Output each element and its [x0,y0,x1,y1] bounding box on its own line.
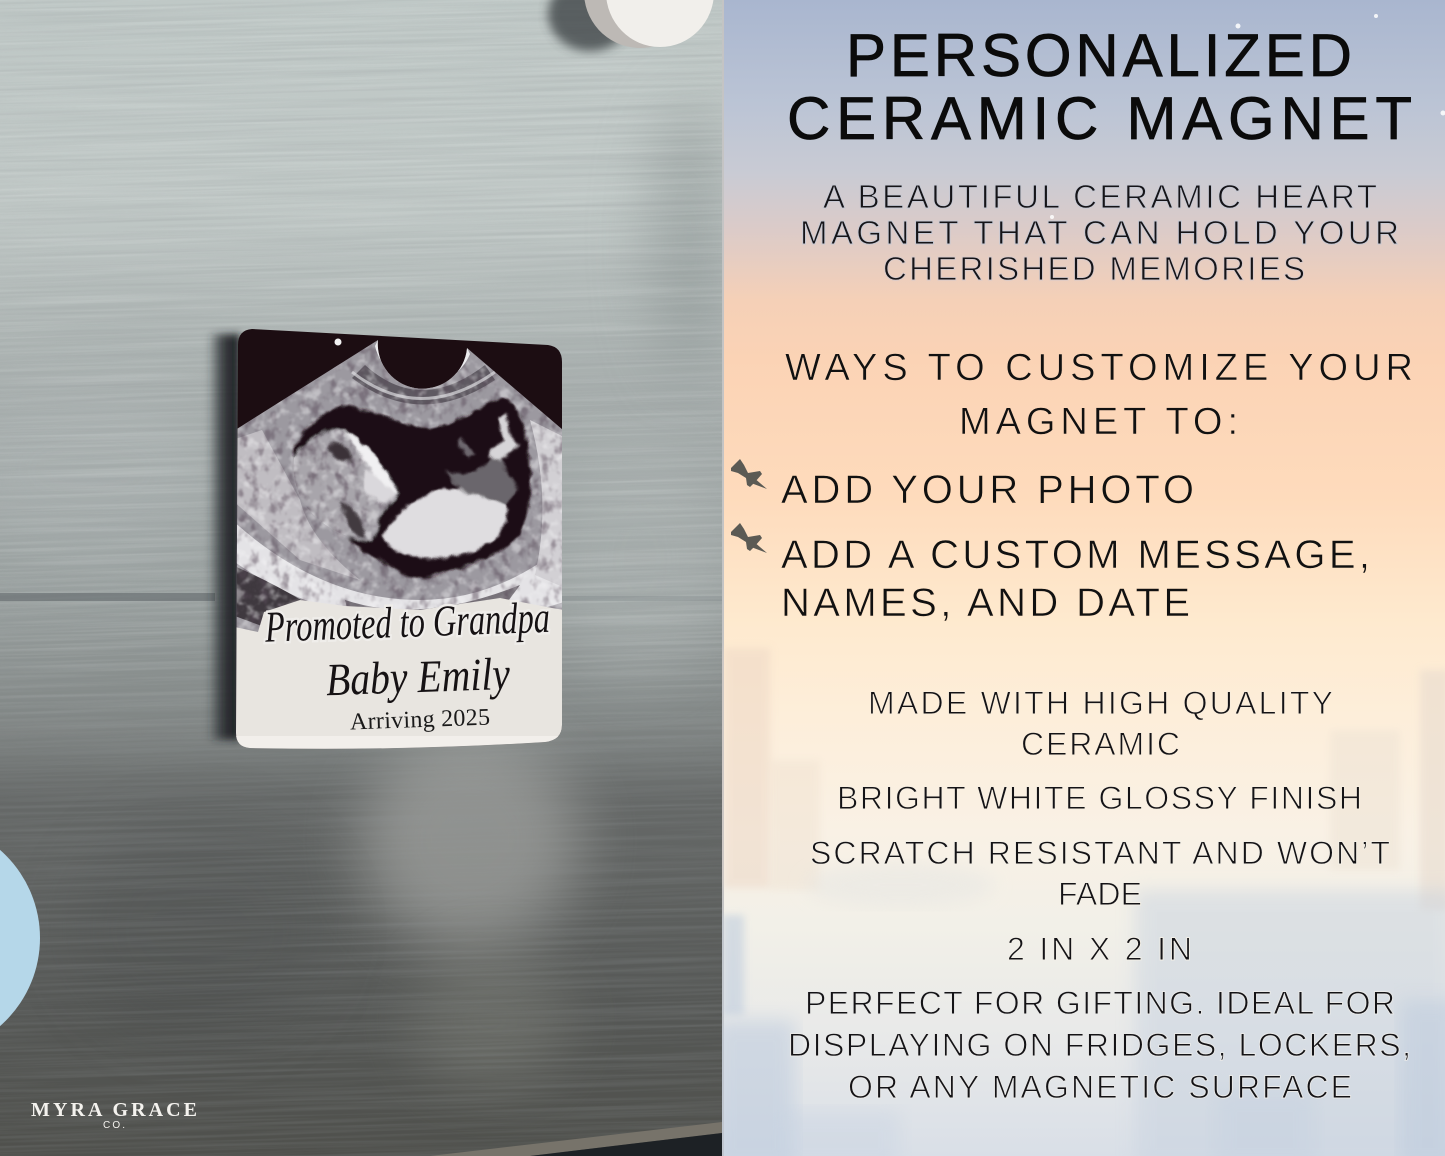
icon: push pin 2 [731,523,767,553]
ultrasound scan [230,330,570,640]
intro text [802,185,1398,281]
feature: scratch resistant [811,841,1390,906]
fridge magnet: white round top [548,0,714,64]
customize option: message: NAMES, AND DATE [781,581,1190,625]
icon: push pin 1 [731,459,767,489]
magnet shadow [208,334,240,740]
title: PERSONALIZED [846,22,1352,89]
customize option: message [782,540,1366,621]
title [790,33,1411,140]
customize option: message: ADD A CUSTOM MESSAGE, [781,533,1370,577]
brand logo: CO. [103,1120,125,1131]
feature: gifting and uses: OR ANY MAGNETIC SURFACE [848,1069,1352,1105]
brand logo: MYRA GRACE [31,1099,197,1121]
feature: high quality ceramic [871,692,1332,755]
fridge magnet: blue round left [0,850,40,1026]
brand logo [31,1103,196,1128]
customize heading: WAYS TO CUSTOMIZE YOUR [785,347,1413,389]
ceramic magnet [230,325,570,760]
feature: high quality ceramic: CERAMIC [1021,726,1180,762]
feature: gifting and uses [790,990,1408,1099]
feature: size: 2 IN X 2 IN [1007,931,1192,967]
magnet text: Arriving 2025: Arriving 2025 [350,705,490,735]
feature: gifting and uses: PERFECT FOR GIFTING. IDEAL FOR [805,985,1395,1021]
title: CERAMIC MAGNET [787,85,1412,152]
feature: gifting and uses: DISPLAYING ON FRIDGES, LOCKERS, [788,1027,1411,1063]
panel: fridge photo [0,0,776,1156]
feature: high quality ceramic: MADE WITH HIGH QUALITY [868,685,1333,721]
customize heading: MAGNET TO: [959,401,1238,443]
feature: scratch resistant: FADE [1058,876,1142,912]
panel: watercolor sky [715,0,1445,1156]
watercolor city skyline [715,648,1445,1156]
white text area [236,598,562,749]
feature: glossy finish: BRIGHT WHITE GLOSSY FINISH [837,780,1362,816]
intro text: A BEAUTIFUL CERAMIC HEART [823,178,1377,215]
intro text: MAGNET THAT CAN HOLD YOUR [800,214,1399,251]
feature: scratch resistant: SCRATCH RESISTANT AND WON’T [810,835,1390,871]
sky stars [1016,14,1445,219]
magnet text: Promoted to Grandpa: Promoted to Grandpa [263,593,551,652]
customize option: photo: ADD YOUR PHOTO [781,468,1194,512]
intro text: CHERISHED MEMORIES [883,250,1305,287]
magnet text: Baby Emily: Baby Emily [325,648,511,705]
customize heading [786,354,1411,434]
